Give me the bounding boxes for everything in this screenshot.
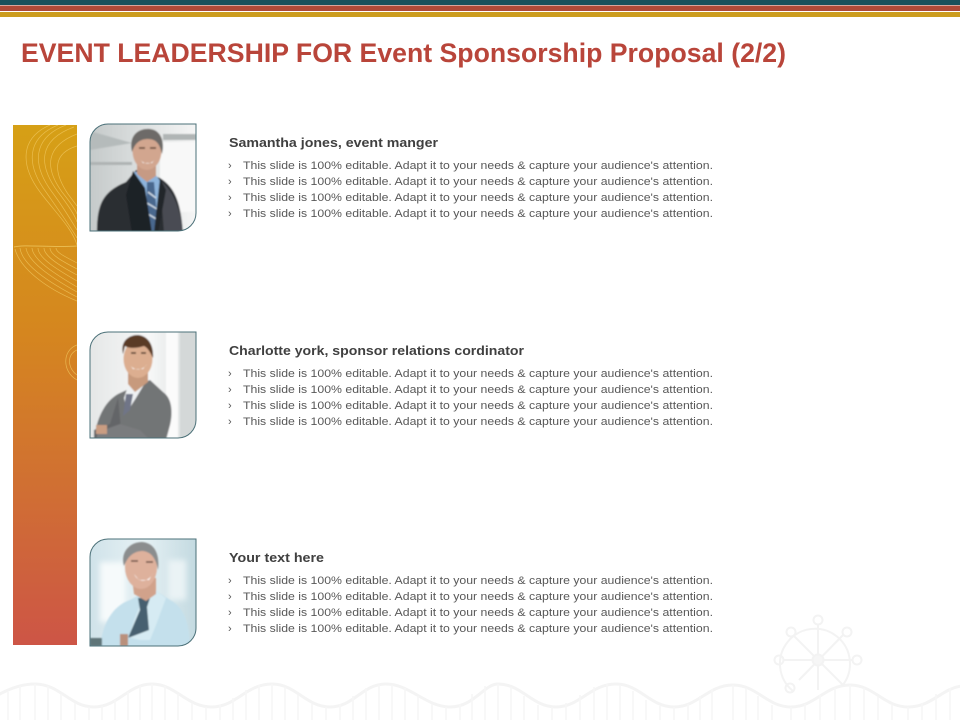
bullet list: person 3: This slide is 100% editable. Adapt it to your needs & capture your audience's attention. (243, 591, 713, 603)
photo: older man in light blue shirt (88, 537, 198, 648)
bullet list: person 2: › (228, 416, 232, 428)
bullet list: person 1: › (228, 192, 232, 204)
title: EVENT LEADERSHIP FOR Event Sponsorship Proposal (2/2) (21, 38, 786, 68)
bullet list: person 3: › (228, 575, 232, 587)
icon: ferris wheel watermark (774, 616, 862, 692)
bullet list: person 2: › (228, 400, 232, 412)
bullet list: person 2: This slide is 100% editable. Adapt it to your needs & capture your audience's attention. (243, 384, 713, 396)
panel: gradient sidebar (13, 125, 77, 645)
bullet list: person 2: › (228, 368, 232, 380)
heading: person 2: Charlotte york, sponsor relations cordinator (229, 343, 524, 358)
heading: person 1: Samantha jones, event manger (229, 135, 438, 150)
bullet list: person 1 (228, 160, 713, 220)
bullet list: person 3: This slide is 100% editable. Adapt it to your needs & capture your audience's attention. (243, 575, 713, 587)
bullet list: person 3: › (228, 607, 232, 619)
bullet list: person 3: › (228, 591, 232, 603)
bullet list: person 3: › (228, 623, 232, 635)
bullet list: person 2: This slide is 100% editable. Adapt it to your needs & capture your audience's attention. (243, 400, 713, 412)
background: roller coaster watermark (0, 684, 960, 720)
bullet list: person 1: This slide is 100% editable. Adapt it to your needs & capture your audience's attention. (243, 176, 713, 188)
panel: person 3 (88, 537, 713, 648)
bullet list: person 1: This slide is 100% editable. Adapt it to your needs & capture your audience's attention. (243, 160, 713, 172)
panel: person 1 (88, 122, 713, 233)
bullet list: person 3 (228, 575, 713, 635)
bullet list: person 2: This slide is 100% editable. Adapt it to your needs & capture your audience's attention. (243, 416, 713, 428)
bullet list: person 1: › (228, 208, 232, 220)
bullet list: person 2 (228, 368, 713, 428)
bullet list: person 1: › (228, 160, 232, 172)
bullet list: person 1: › (228, 176, 232, 188)
bullet list: person 3: This slide is 100% editable. Adapt it to your needs & capture your audience's attention. (243, 623, 713, 635)
photo: smiling man in dark suit (88, 122, 198, 233)
bullet list: person 2: This slide is 100% editable. Adapt it to your needs & capture your audience's attention. (243, 368, 713, 380)
bullet list: person 3: This slide is 100% editable. Adapt it to your needs & capture your audience's attention. (243, 607, 713, 619)
panel: person 2 (88, 330, 713, 440)
heading: person 3: Your text here (229, 550, 324, 565)
bullet list: person 2: › (228, 384, 232, 396)
bullet list: person 1: This slide is 100% editable. Adapt it to your needs & capture your audience's attention. (243, 208, 713, 220)
top stripes (0, 0, 960, 17)
bullet list: person 1: This slide is 100% editable. Adapt it to your needs & capture your audience's attention. (243, 192, 713, 204)
photo: man in grey suit with crossed arms (88, 330, 198, 440)
